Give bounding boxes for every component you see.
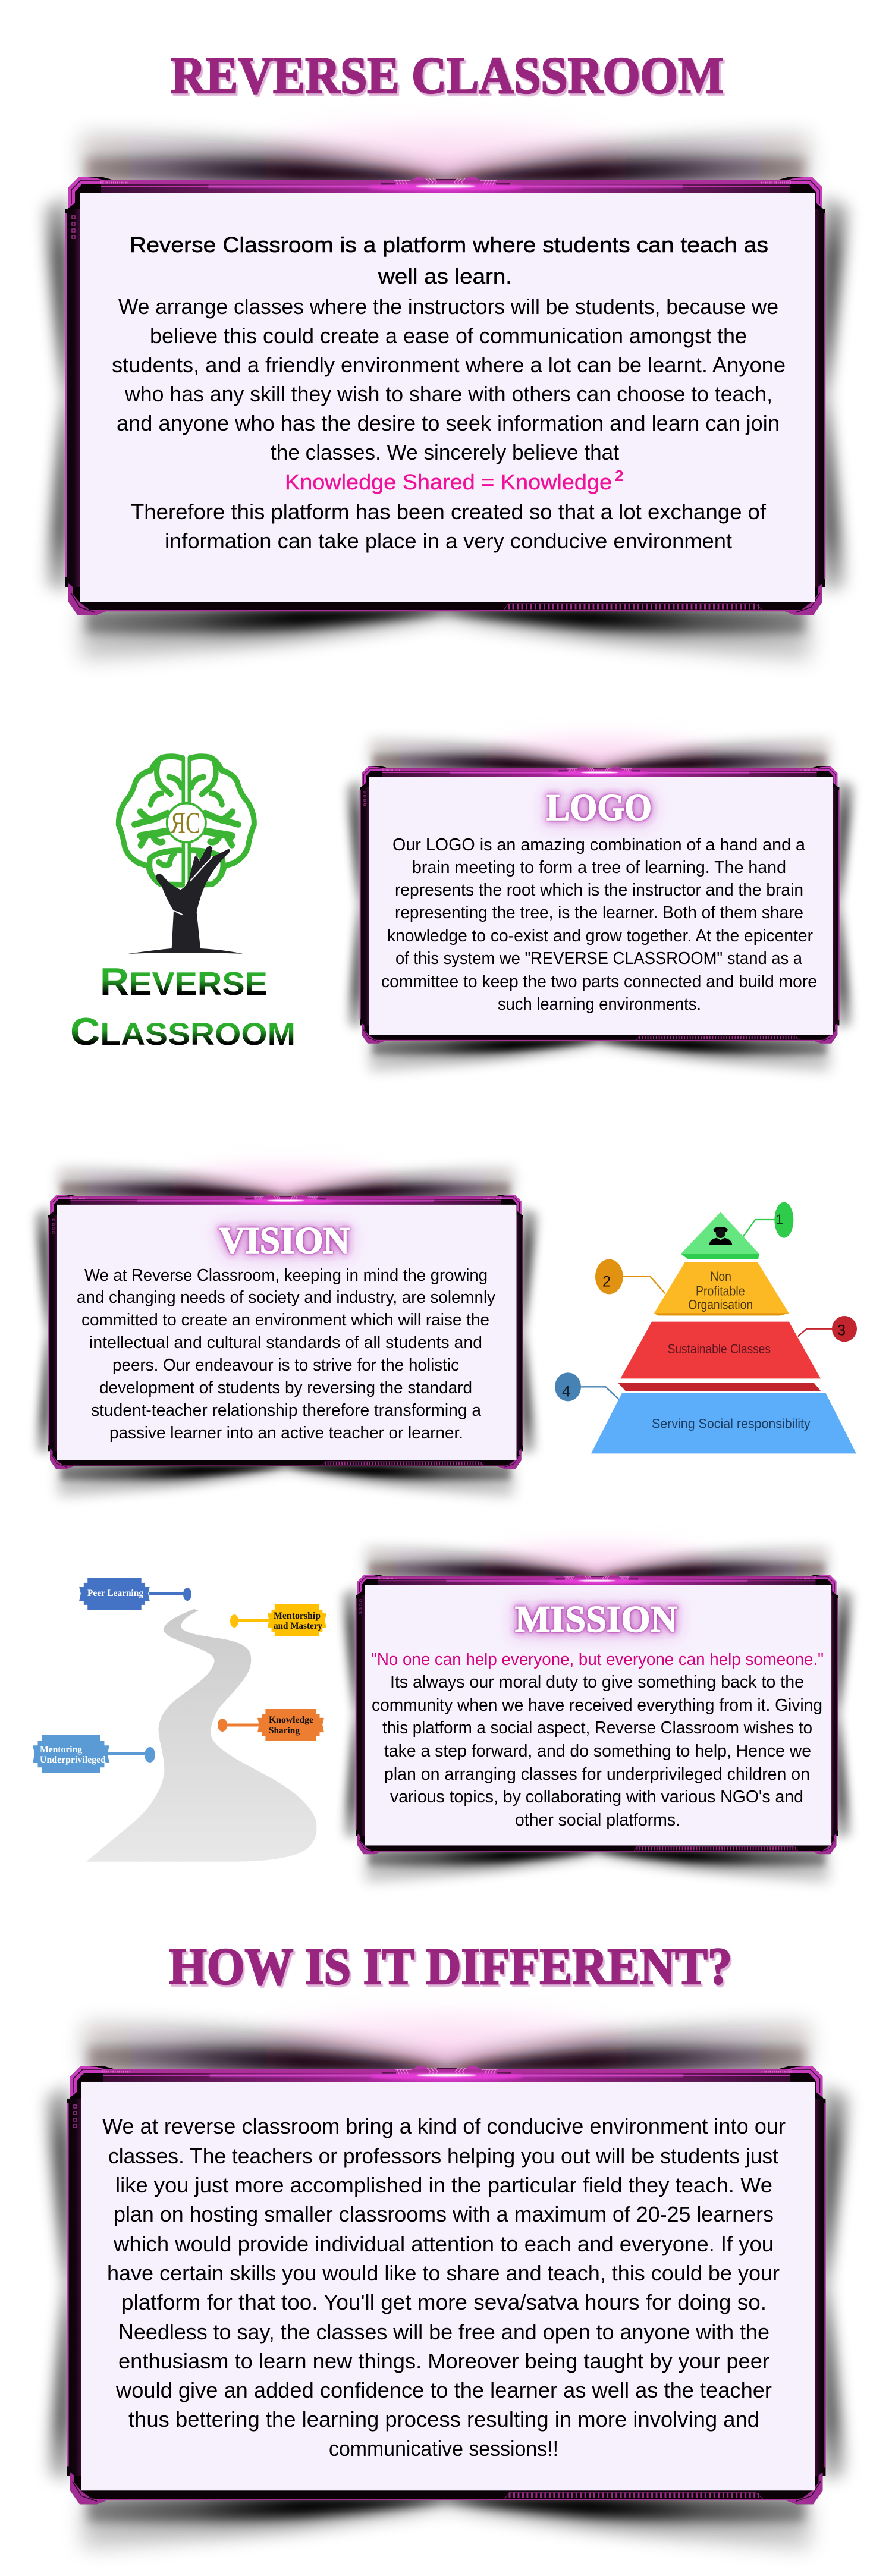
text block: vision: committed to create an environment which will raise the bbox=[81, 1311, 489, 1330]
callout 4 bbox=[555, 1372, 619, 1401]
text block: vision bbox=[77, 1266, 496, 1443]
heading: LOGO: LOGO bbox=[546, 786, 652, 828]
text: logo wordmark: REVERSE bbox=[100, 960, 268, 1003]
text block: introduction: students, and a friendly environment where a lot can be learnt. Anyone bbox=[112, 353, 786, 377]
marker: knowledge sharing: Knowledge bbox=[269, 1715, 313, 1725]
text block: vision: development of students by reversing the standard bbox=[99, 1378, 472, 1397]
marker: mentoring underprivileged bbox=[33, 1735, 155, 1773]
text block: mission: take a step forward, and do something to help, Hence we bbox=[384, 1742, 811, 1761]
callout 2 bbox=[595, 1259, 665, 1294]
text block: introduction: Knowledge Shared = Knowledge bbox=[285, 470, 612, 494]
callout 1 bbox=[743, 1202, 793, 1238]
panel: introduction bbox=[45, 131, 848, 659]
callout 1: 1 bbox=[775, 1211, 783, 1227]
text block: how is it different: which would provide individual attention to each and everyone. If you bbox=[113, 2232, 774, 2256]
pyramid tier 3: sustainable classes bbox=[618, 1322, 821, 1391]
text: logo wordmark bbox=[70, 960, 296, 1053]
text block: how is it different: communicative sessions!! bbox=[329, 2436, 558, 2461]
text block: logo: knowledge to co-exist and grow together. At the epicenter bbox=[387, 926, 813, 945]
marker: mentorship and mastery: and Mastery bbox=[274, 1621, 322, 1631]
text block: how is it different: like you just more accomplished in the particular field they teach. We bbox=[115, 2173, 772, 2197]
title: How is it different: HOW IS IT DIFFERENT? bbox=[169, 1938, 732, 1996]
text block: vision: passive learner into an active teacher or learner. bbox=[109, 1424, 463, 1443]
text block: mission quote: "No one can help everyone, but everyone can help someone." bbox=[371, 1650, 824, 1669]
text block: how is it different: enthusiasm to learn new things. Moreover being taught by your peer bbox=[118, 2349, 769, 2373]
logo: brain tree and hand bbox=[70, 756, 296, 1053]
callout 2: 2 bbox=[602, 1273, 611, 1290]
pyramid tier 2: non profitable organisation: Non bbox=[710, 1269, 731, 1284]
marker: mentorship and mastery bbox=[230, 1604, 326, 1636]
road bbox=[86, 1609, 316, 1862]
text block: mission: Its always our moral duty to give something back to the bbox=[390, 1673, 804, 1692]
panel frame: vision bbox=[36, 1167, 538, 1496]
panel: mission bbox=[343, 1546, 853, 1882]
marker: mentoring underprivileged: Mentoring bbox=[40, 1745, 82, 1755]
text block: how is it different bbox=[102, 2114, 786, 2461]
text block: logo: represents the root which is the instructor and the brain bbox=[395, 881, 803, 900]
panel frame: mission bbox=[343, 1546, 853, 1882]
text: logo wordmark: CLASSROOM bbox=[70, 1010, 296, 1053]
text block: introduction: Therefore this platform has been created so that a lot exchange of bbox=[131, 500, 767, 524]
text block: mission: plan on arranging classes for underprivileged children on bbox=[384, 1765, 810, 1784]
text block: how is it different: Needless to say, the classes will be free and open to anyone with the bbox=[118, 2320, 769, 2344]
text block: logo: representing the tree, is the learner. Both of them share bbox=[395, 903, 803, 922]
text block: vision: We at Reverse Classroom, keeping in mind the growing bbox=[84, 1266, 488, 1285]
callout 3 bbox=[798, 1316, 857, 1342]
text block: introduction: well as learn. bbox=[378, 264, 512, 288]
text block: introduction: who has any skill they wish to share with others can choose to teach, bbox=[124, 382, 772, 406]
text block: introduction: believe this could create a ease of communication amongst the bbox=[150, 323, 747, 348]
marker: peer learning bbox=[79, 1578, 191, 1610]
text block: how is it different: We at reverse classroom bring a kind of conducive environment into our bbox=[102, 2114, 786, 2138]
callout 3: 3 bbox=[837, 1322, 846, 1339]
text block: introduction: 2 bbox=[615, 467, 623, 485]
text: RC monogram: ЯC bbox=[171, 806, 200, 839]
text block: how is it different: have certain skills you would like to share and teach, this could be your bbox=[107, 2261, 780, 2285]
chart: pyramid bbox=[555, 1202, 857, 1453]
text block: how is it different: plan on hosting smaller classrooms with a maximum of 20-25 learners bbox=[114, 2202, 774, 2226]
marker: mentorship and mastery: Mentorship bbox=[274, 1611, 321, 1621]
marker: peer learning: Peer Learning bbox=[87, 1588, 143, 1598]
pyramid tier 2: non profitable organisation bbox=[654, 1262, 789, 1315]
pyramid tier 4: serving social responsibility: Serving Social responsibility bbox=[652, 1416, 811, 1431]
text block: how is it different: classes. The teachers or professors helping you out will be students just bbox=[108, 2144, 778, 2168]
heading: VISION: VISION bbox=[219, 1219, 350, 1261]
text block: vision: and changing needs of society and industry, are solemnly bbox=[77, 1288, 496, 1307]
text block: logo: Our LOGO is an amazing combination of a hand and a bbox=[392, 835, 805, 855]
pyramid tier 3: sustainable classes: Sustainable Classes bbox=[668, 1342, 771, 1356]
pyramid tier 1: top bbox=[681, 1212, 759, 1259]
marker: knowledge sharing bbox=[218, 1709, 324, 1741]
text block: logo: committee to keep the two parts connected and build more bbox=[381, 972, 817, 991]
panel frame: logo bbox=[347, 738, 853, 1071]
text block: introduction: and anyone who has the desire to seek information and learn can join bbox=[117, 411, 780, 435]
text block: mission: community when we have received everything from it. Giving bbox=[372, 1696, 822, 1715]
text block: logo: such learning environments. bbox=[498, 995, 701, 1014]
text block: introduction: We arrange classes where the instructors will be students, because we bbox=[118, 294, 778, 319]
panel: vision bbox=[36, 1167, 538, 1496]
panel: how is it different bbox=[47, 2021, 848, 2548]
text block: mission bbox=[372, 1673, 822, 1830]
text block: how is it different: platform for that too. You'll get more seva/satva hours for doing so. bbox=[121, 2290, 767, 2314]
text block: how is it different: thus bettering the learning process resulting in more involving and bbox=[128, 2407, 759, 2432]
panel: logo description bbox=[347, 738, 853, 1071]
text block: logo: of this system we "REVERSE CLASSROOM" stand as a bbox=[395, 949, 802, 968]
text block: introduction: information can take place in a very conducive environment bbox=[165, 529, 732, 553]
icon: hand trunk bbox=[128, 846, 243, 954]
text block: mission: various topics, by collaborating with various NGO's and bbox=[390, 1788, 803, 1807]
text block: vision: student-teacher relationship therefore transforming a bbox=[91, 1401, 481, 1420]
marker: knowledge sharing: Sharing bbox=[269, 1726, 300, 1736]
icon: green brain bbox=[118, 756, 254, 885]
panel frame: how is it different bbox=[47, 2021, 848, 2548]
pyramid tier 4: serving social responsibility bbox=[591, 1393, 856, 1453]
heading: MISSION: MISSION bbox=[515, 1598, 677, 1640]
text block: mission: this platform a social aspect, Reverse Classroom wishes to bbox=[382, 1719, 812, 1738]
text block: vision: peers. Our endeavour is to strive for the holistic bbox=[112, 1356, 459, 1375]
pyramid tier 2: non profitable organisation: Profitable bbox=[696, 1283, 745, 1298]
panel frame: introduction bbox=[45, 131, 848, 659]
diagram: winding road bbox=[33, 1578, 326, 1862]
text block: logo bbox=[381, 835, 817, 1014]
text block: logo: brain meeting to form a tree of learning. The hand bbox=[412, 858, 786, 877]
title: Reverse Classroom: REVERSE CLASSROOM bbox=[171, 47, 724, 105]
pyramid tier 2: non profitable organisation: Organisation bbox=[688, 1298, 753, 1312]
text block: mission: other social platforms. bbox=[515, 1811, 680, 1830]
text block: introduction: Reverse Classroom is a platform where students can teach as bbox=[130, 233, 768, 257]
text block: introduction: the classes. We sincerely believe that bbox=[271, 440, 619, 464]
marker: mentoring underprivileged: Underprivileged bbox=[40, 1755, 106, 1765]
text block: vision: intellectual and cultural standards of all students and bbox=[89, 1333, 482, 1352]
text block: how is it different: would give an added confidence to the learner as well as the teacher bbox=[115, 2378, 772, 2402]
callout 4: 4 bbox=[562, 1383, 570, 1400]
text block: introduction bbox=[112, 233, 786, 553]
